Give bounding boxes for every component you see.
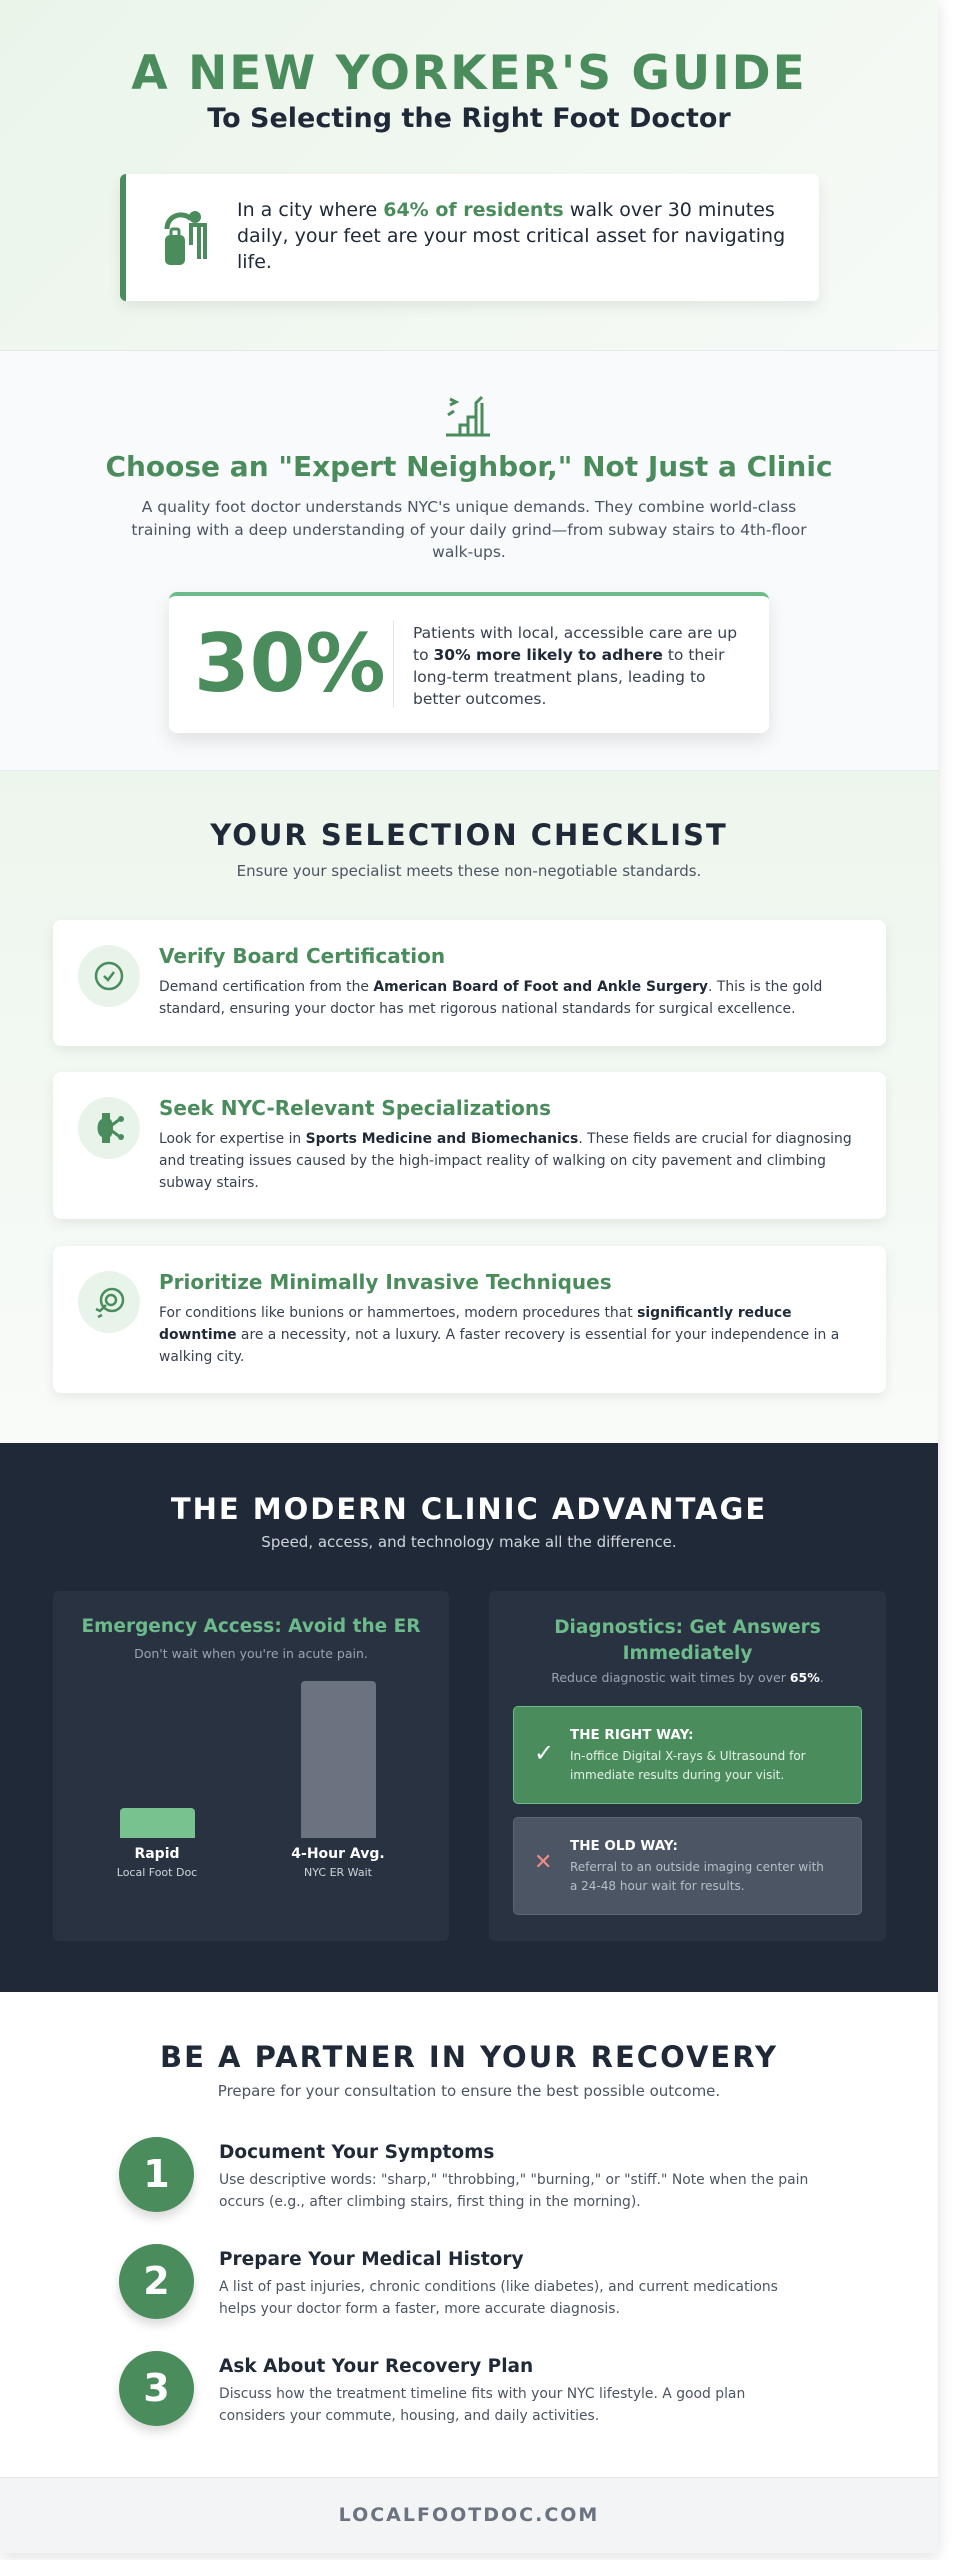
body	[159, 979, 822, 1017]
card: specializations	[53, 1072, 886, 1219]
box: old way: Referral to an outside imaging center with	[570, 1860, 824, 1874]
box: old way: THE OLD WAY:	[570, 1838, 678, 1854]
step 2	[116, 2244, 778, 2328]
subtext: Reduce diagnostic wait times by over 65%.	[551, 1670, 824, 1685]
subtitle: Prepare for your consultation to ensure the best possible outcome.	[218, 2082, 720, 2100]
footer	[0, 2477, 938, 2553]
body: standard, ensuring your doctor has met rigorous national standards for surgical excellence.	[159, 1001, 796, 1017]
section: checklist	[0, 771, 938, 1443]
stat card	[169, 592, 769, 733]
box: right way: In-office Digital X-rays & Ultrasound for	[570, 1749, 806, 1763]
body: downtime are a necessity, not a luxury. A faster recovery is essential for your independence in a	[159, 1327, 839, 1343]
box: right way	[513, 1706, 862, 1804]
step 1: Use descriptive words: "sharp," "throbbing," "burning," or "stiff." Note when the pain	[219, 2172, 808, 2188]
panel: diagnostics	[489, 1591, 886, 1941]
panel: emergency access	[53, 1591, 449, 1941]
heading: Diagnostics: Get Answers Immediately	[554, 1617, 821, 1664]
box: right way: immediate results during your visit.	[570, 1768, 784, 1782]
section: partner in recovery	[0, 1992, 938, 2477]
body	[159, 1305, 839, 1365]
bar: local	[120, 1808, 195, 1838]
heading: Prioritize Minimally Invasive Techniques	[159, 1270, 612, 1294]
box: old way: a 24-48 hour wait for results.	[570, 1879, 745, 1893]
step 3: 3	[143, 2366, 170, 2410]
body: walking city.	[159, 1349, 244, 1365]
bar chart: Local Foot Doc	[117, 1866, 197, 1879]
step 1	[116, 2137, 808, 2221]
body: For conditions like bunions or hammertoes, modern procedures that significantly reduce	[159, 1305, 792, 1321]
step 3: considers your commute, housing, and daily activities.	[219, 2408, 599, 2424]
big stat: 30%	[194, 617, 385, 710]
box: right way: THE RIGHT WAY:	[570, 1727, 694, 1743]
body: Look for expertise in Sports Medicine and Biomechanics. These fields are crucial for diagnosing	[159, 1131, 852, 1147]
body: Demand certification from the American Board of Foot and Ankle Surgery. This is the gold	[159, 979, 822, 995]
heading: Choose an "Expert Neighbor," Not Just a Clinic	[105, 450, 833, 483]
subtext: Don't wait when you're in acute pain.	[134, 1646, 368, 1661]
section: header	[0, 0, 938, 351]
bar chart: NYC ER Wait	[304, 1866, 372, 1879]
card: board certification	[53, 920, 886, 1046]
body: subway stairs.	[159, 1175, 259, 1191]
bar chart	[117, 1681, 385, 1879]
icon: commuter	[164, 211, 207, 265]
label: 4-hour: 4-Hour Avg.	[291, 1846, 385, 1862]
stat text: Patients with local, accessible care are up to 30% more likely to adhere to their long-term treatment plans, leading to better outcomes.	[413, 624, 737, 708]
step 2: Prepare Your Medical History	[219, 2249, 524, 2270]
heading: Verify Board Certification	[159, 944, 445, 968]
step 1: occurs (e.g., after climbing stairs, first thing in the morning).	[219, 2194, 641, 2210]
title: A NEW YORKER'S GUIDE	[131, 46, 807, 101]
subtitle: Speed, access, and technology make all the difference.	[261, 1533, 677, 1551]
box: old way: ✕	[534, 1850, 552, 1875]
title: THE MODERN CLINIC ADVANTAGE	[171, 1492, 767, 1526]
card: minimally invasive	[53, 1246, 886, 1393]
step 3: Discuss how the treatment timeline fits with your NYC lifestyle. A good plan	[219, 2386, 745, 2402]
heading: Emergency Access: Avoid the ER	[81, 1616, 420, 1637]
step 3: Ask About Your Recovery Plan	[219, 2356, 533, 2377]
box: old way	[513, 1817, 862, 1915]
icon: stairs chart	[446, 396, 490, 436]
checklist title: YOUR SELECTION CHECKLIST	[210, 818, 728, 852]
step 1: Document Your Symptoms	[219, 2142, 494, 2163]
footer: LOCALFOOTDOC.COM	[339, 2504, 599, 2526]
callout text: In a city where 64% of residents walk over 30 minutes daily, your feet are your most critical asset for navigating life.	[237, 199, 785, 273]
icon: target	[78, 1271, 140, 1333]
section: modern clinic advantage	[0, 1443, 938, 1992]
step 2: 2	[143, 2259, 170, 2303]
checklist subtitle: Ensure your specialist meets these non-negotiable standards.	[237, 862, 701, 880]
step 2: A list of past injuries, chronic conditions (like diabetes), and current medications	[219, 2279, 778, 2295]
step 2: helps your doctor form a faster, more accurate diagnosis.	[219, 2301, 620, 2317]
icon: joint	[78, 1097, 140, 1159]
title: BE A PARTNER IN YOUR RECOVERY	[160, 2040, 778, 2074]
body: and treating issues caused by the high-impact reality of walking on city pavement and climbing	[159, 1153, 826, 1169]
section: expert neighbor	[0, 351, 938, 771]
step 3	[116, 2351, 745, 2435]
bar: ER	[301, 1681, 376, 1838]
box: right way: ✓	[534, 1739, 554, 1767]
heading: Seek NYC-Relevant Specializations	[159, 1096, 551, 1120]
icon: check circle	[78, 945, 140, 1007]
callout card	[120, 174, 819, 301]
paragraph: A quality foot doctor understands NYC's unique demands. They combine world-class training with a deep understanding of your daily grind—from subway stairs to 4th-floor walk-ups.	[131, 498, 807, 561]
step 1: 1	[143, 2152, 170, 2196]
subtitle: To Selecting the Right Foot Doctor	[207, 103, 731, 134]
body	[159, 1131, 852, 1191]
label: rapid: Rapid	[134, 1846, 180, 1862]
